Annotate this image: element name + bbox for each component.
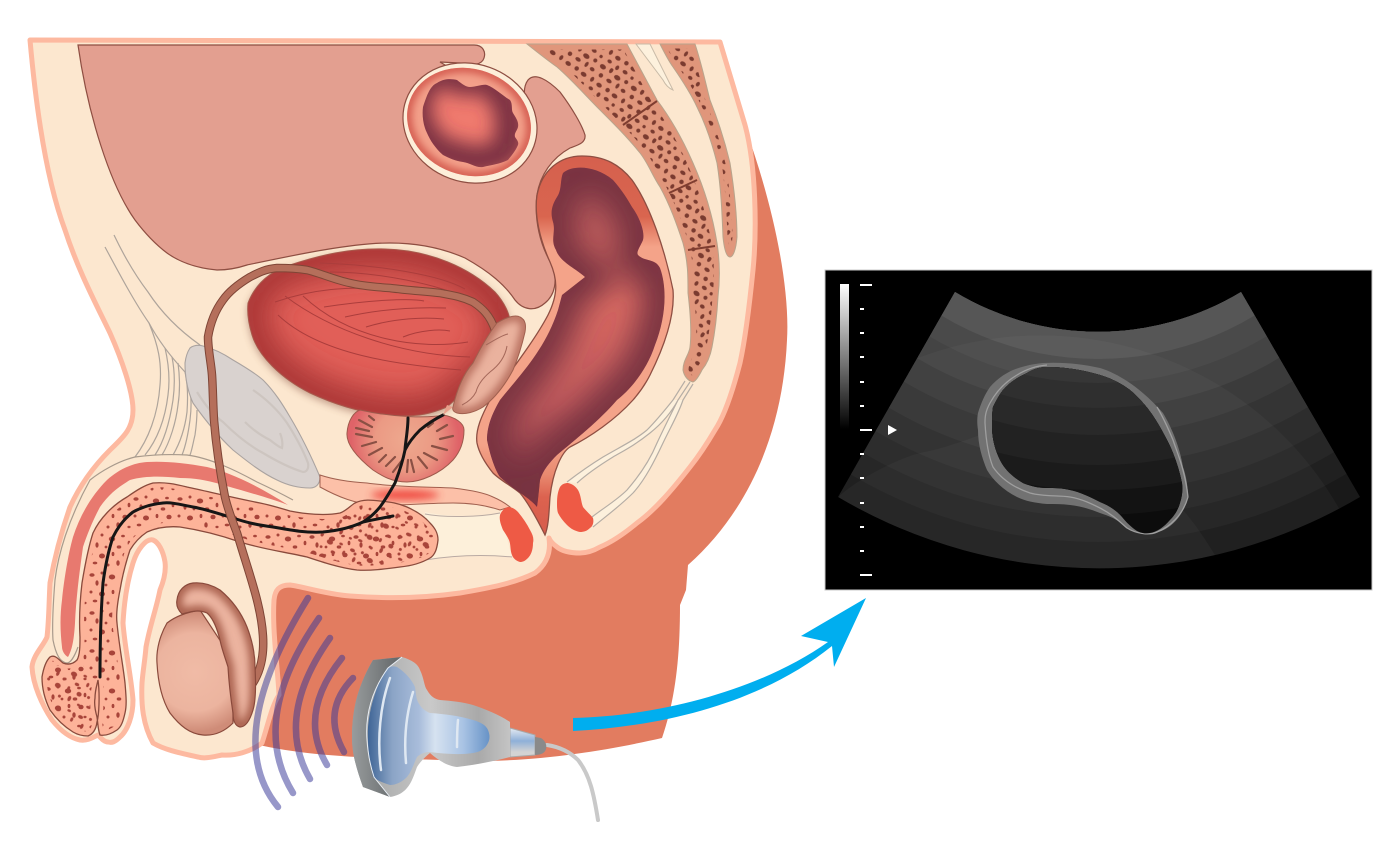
- probe blue lens: [368, 666, 490, 785]
- buttock and perineum tissue: [240, 130, 787, 761]
- colon cross-section: [402, 62, 538, 184]
- depth ruler: [860, 284, 872, 576]
- testis: [157, 610, 233, 735]
- probe highlights: [367, 657, 402, 797]
- ultrasound probe: [352, 657, 598, 820]
- coccygeal bone: [660, 44, 737, 257]
- rectum: [477, 156, 673, 535]
- abdominal cavity: [78, 45, 585, 309]
- lower lighter overlay: [830, 435, 1218, 590]
- corpus cavernosum: [60, 462, 288, 657]
- corpus spongiosum and glans: [40, 483, 440, 740]
- blue arrow: [573, 598, 866, 731]
- body outline: [30, 40, 755, 758]
- vas deferens: [208, 268, 495, 683]
- probe neck connector: [510, 728, 535, 757]
- probe cable: [547, 745, 598, 820]
- probe end cap: [535, 737, 546, 755]
- probe front face: [352, 657, 402, 797]
- tunica outline: [53, 455, 293, 663]
- epididymis: [177, 583, 256, 727]
- screen background: [825, 270, 1372, 590]
- prostate: [347, 410, 464, 482]
- suspensory ligament fibres: [105, 235, 200, 457]
- anal sphincter left: [500, 507, 533, 562]
- pubic bone: [185, 345, 320, 488]
- panel: ultrasound image: [824, 270, 1372, 590]
- ultrasound waves: [255, 598, 353, 807]
- urinary catheter: [100, 415, 443, 677]
- bladder wall: [977, 363, 1188, 534]
- sacrum with spongy dots: [527, 44, 719, 382]
- lighter overlay arc: [830, 335, 1372, 590]
- focus marker: [888, 425, 897, 435]
- ultrasound sector with depth bands: [838, 292, 1360, 568]
- bladder wall highlight: [985, 365, 1188, 534]
- bulb cavity: [425, 512, 512, 560]
- membranous urethra tube: [320, 475, 510, 510]
- probe body: [352, 657, 510, 797]
- anal sphincter right: [557, 483, 593, 532]
- pelvic floor fibres: [567, 381, 693, 527]
- bladder lumen with depth bands: [992, 367, 1182, 534]
- red glow on urethra: [371, 490, 439, 500]
- greyscale bar: [840, 284, 849, 429]
- panel: anatomy cross-section: [30, 40, 787, 761]
- seminal vesicle: [443, 316, 525, 415]
- cream sliver between bones: [636, 44, 673, 90]
- bladder shadow: [248, 252, 510, 419]
- bladder: [248, 249, 510, 416]
